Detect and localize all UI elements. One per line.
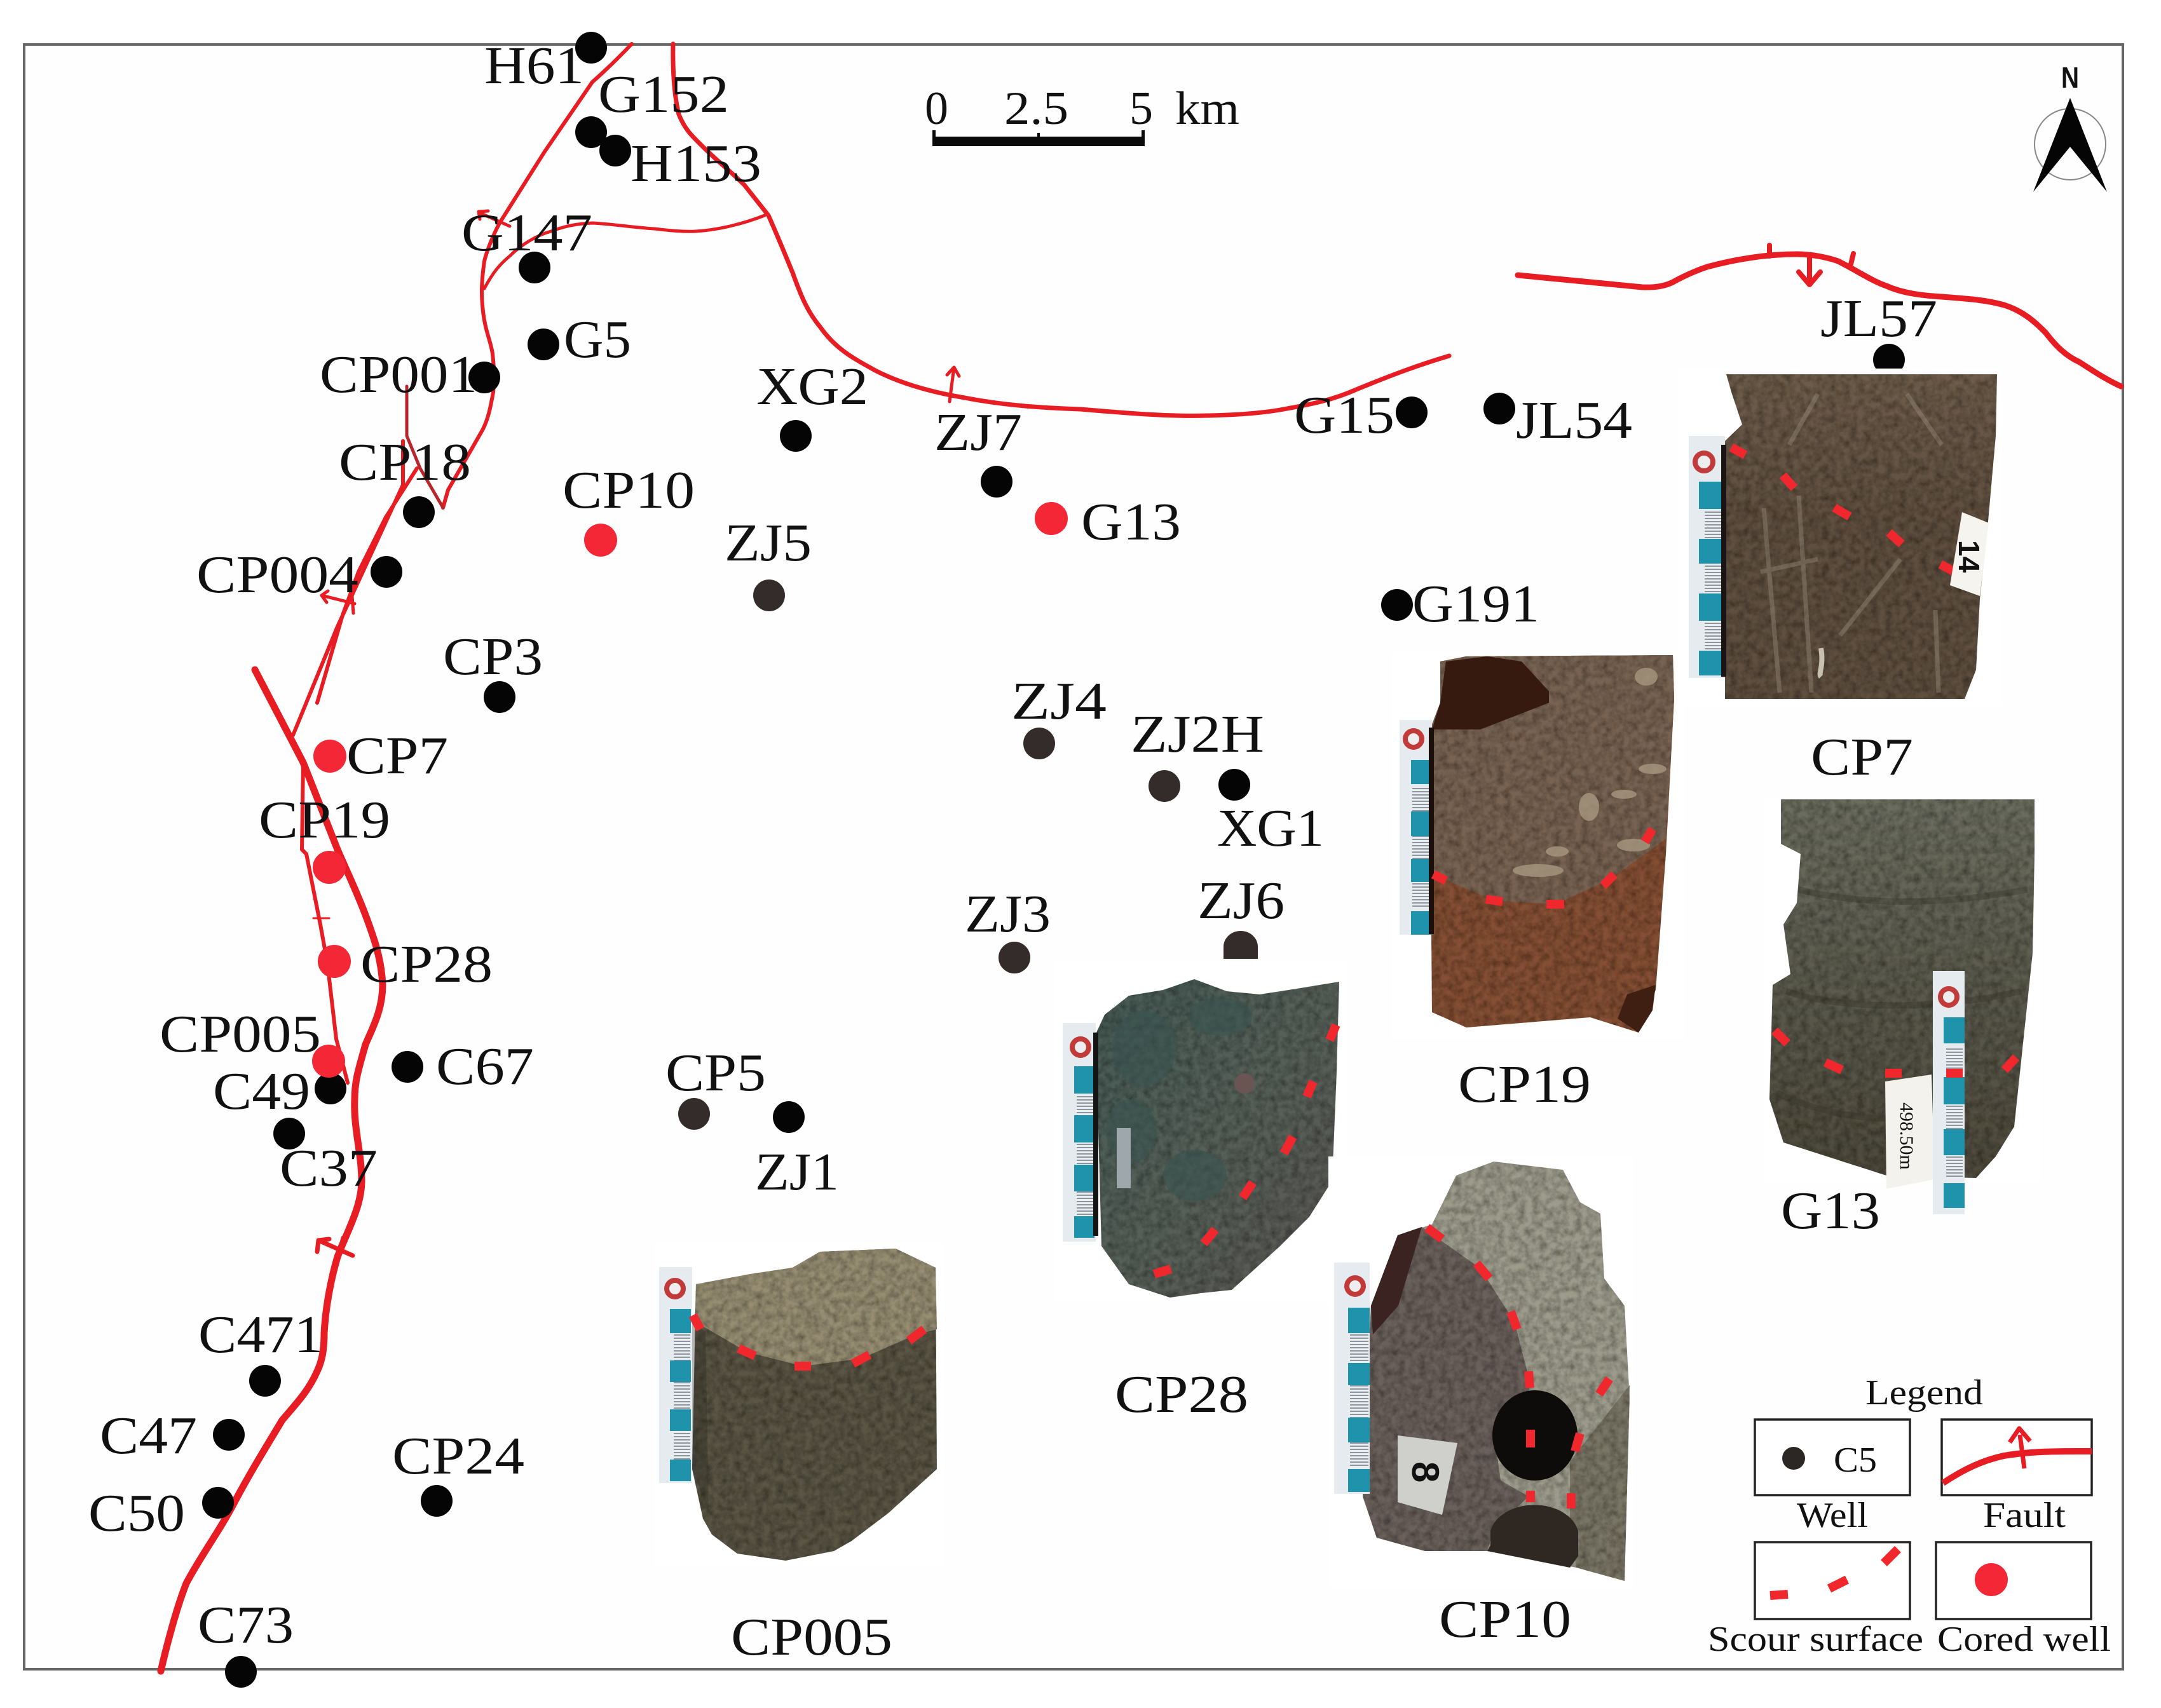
arrow: fault ZJ7: [947, 367, 959, 402]
well labels: ZJ7: [934, 403, 1022, 462]
legend: [1708, 1373, 2111, 1659]
tick: fault CP19: [313, 918, 329, 919]
core photo: CP10: [1328, 1156, 1633, 1589]
well labels: CP7: [346, 726, 448, 785]
core photo: CP19: [1392, 651, 1684, 1039]
fault: inner western strand: [302, 762, 348, 1083]
arrow: north-east fault: [1769, 245, 1853, 285]
fault: central thick fault: [161, 670, 383, 1671]
ruler: CP19: [1400, 720, 1434, 935]
fault tick marks and arrows: [313, 211, 1853, 1261]
fault: branch near CP18: [407, 386, 443, 508]
well labels: JL54: [1516, 391, 1632, 450]
depth tag: CP7: 14: [1953, 540, 1986, 573]
scour surface: CP7: [1731, 447, 1954, 572]
ruler: CP10: [1334, 1263, 1370, 1494]
well labels: ZJ1: [755, 1142, 839, 1202]
well labels: CP19: [259, 790, 390, 850]
depth tag: G13: 498.50m: [1896, 1102, 1917, 1170]
well labels: C37: [280, 1139, 378, 1198]
well labels: G191: [1412, 574, 1539, 634]
north arrow: [2033, 61, 2107, 192]
core caption: CP28: CP28: [1115, 1365, 1248, 1424]
legend item: cored well: [1936, 1542, 2111, 1659]
ruler: CP28: [1063, 1023, 1098, 1242]
core caption: CP10: CP10: [1439, 1590, 1571, 1649]
well labels: C49: [213, 1062, 310, 1121]
well labels: H61: [484, 36, 584, 95]
well: black wells: [202, 32, 1905, 1688]
well labels: G147: [461, 203, 592, 262]
well: cored wells: [312, 502, 1068, 1078]
fault: north central to east: [673, 44, 1449, 416]
ruler: CP7: [1689, 436, 1726, 678]
well labels: C67: [436, 1037, 534, 1096]
legend item: fault: Fault: [1983, 1496, 2066, 1535]
ruler: G13: [1933, 971, 1965, 1214]
scour surface: CP19: [1433, 829, 1653, 904]
fault: second strand: [293, 441, 403, 735]
core photo: CP7: [1678, 369, 2002, 705]
wells: [202, 32, 1905, 1688]
well labels: JL57: [1820, 289, 1937, 348]
scale bar: 0: [925, 83, 948, 135]
well labels: C47: [100, 1406, 197, 1465]
legend item: well: [1755, 1420, 1910, 1535]
scale bar: km: [1175, 83, 1239, 135]
scale bar: 2.5: [1004, 83, 1068, 135]
core caption: CP7: CP7: [1811, 728, 1913, 787]
core caption: CP19: CP19: [1458, 1055, 1591, 1114]
well labels: ZJ3: [965, 884, 1051, 944]
scour surface: G13: [1775, 1031, 2016, 1073]
well labels: XG2: [756, 357, 868, 416]
arrow: fault C37: [317, 1238, 353, 1261]
legend item: scour surface: Scour surface: [1708, 1620, 1923, 1659]
well: dark grey wells: [678, 580, 1258, 1130]
legend item: fault: [1942, 1420, 2092, 1535]
well labels: G15: [1294, 386, 1394, 445]
well labels: ZJ5: [725, 513, 812, 573]
well labels: XG1: [1217, 799, 1324, 858]
well labels: H153: [631, 134, 761, 193]
north arrow: N: [2061, 61, 2079, 94]
core caption: CP005: CP005: [731, 1608, 892, 1667]
legend item: cored well: Cored well: [1937, 1620, 2111, 1659]
core photo: G13: [1764, 797, 2040, 1214]
well labels: G13: [1081, 492, 1181, 552]
core photo: CP28: [1055, 959, 1347, 1303]
fault: north-west thin fault: [443, 44, 632, 508]
well labels: CP3: [443, 627, 543, 686]
depth tag: CP10: [1398, 1435, 1457, 1515]
well labels: C50: [88, 1484, 185, 1543]
fault: north-east thick fault: [1518, 254, 2121, 386]
well labels: CP28: [360, 935, 493, 994]
well labels: CP004: [196, 545, 358, 604]
legend item: well: Well: [1797, 1496, 1868, 1535]
well labels: CP18: [339, 433, 471, 492]
well labels: C73: [198, 1596, 294, 1655]
well labels: ZJ6: [1197, 871, 1285, 930]
well labels: CP24: [392, 1427, 524, 1486]
well labels: CP005: [160, 1005, 321, 1064]
core photo: CP005: [655, 1242, 944, 1566]
ruler: CP005: [659, 1267, 692, 1483]
scour surface: CP10: [1427, 1228, 1609, 1508]
depth tag: G13: [1885, 1074, 1935, 1189]
fault: double strand to CP7: [317, 468, 417, 703]
well labels: CP001: [320, 345, 477, 404]
well labels: G152: [598, 65, 729, 124]
well labels: CP5: [665, 1043, 766, 1102]
scour surface: CP28: [1154, 1025, 1336, 1274]
depth tag: CP7: [1950, 512, 1989, 596]
well labels: CP10: [562, 461, 695, 520]
scour surface: CP005: [693, 1315, 924, 1366]
well labels: C471: [198, 1305, 323, 1364]
core caption: G13: G13: [1781, 1181, 1880, 1240]
well labels: ZJ4: [1011, 672, 1107, 731]
arrow: fault CP004: [322, 588, 355, 613]
legend item: well: C5: [1834, 1440, 1877, 1480]
well labels: ZJ2H: [1131, 705, 1264, 764]
depth tag: CP10: 8: [1404, 1461, 1447, 1482]
scale bar: 5: [1129, 83, 1153, 135]
arrow: fault G147: [479, 211, 510, 226]
legend title: Legend: [1865, 1373, 1983, 1413]
fault: connecting branch: [484, 215, 765, 288]
scale bar: [925, 83, 1239, 146]
legend item: scour surface: [1708, 1542, 1923, 1659]
well labels: G5: [564, 310, 631, 369]
